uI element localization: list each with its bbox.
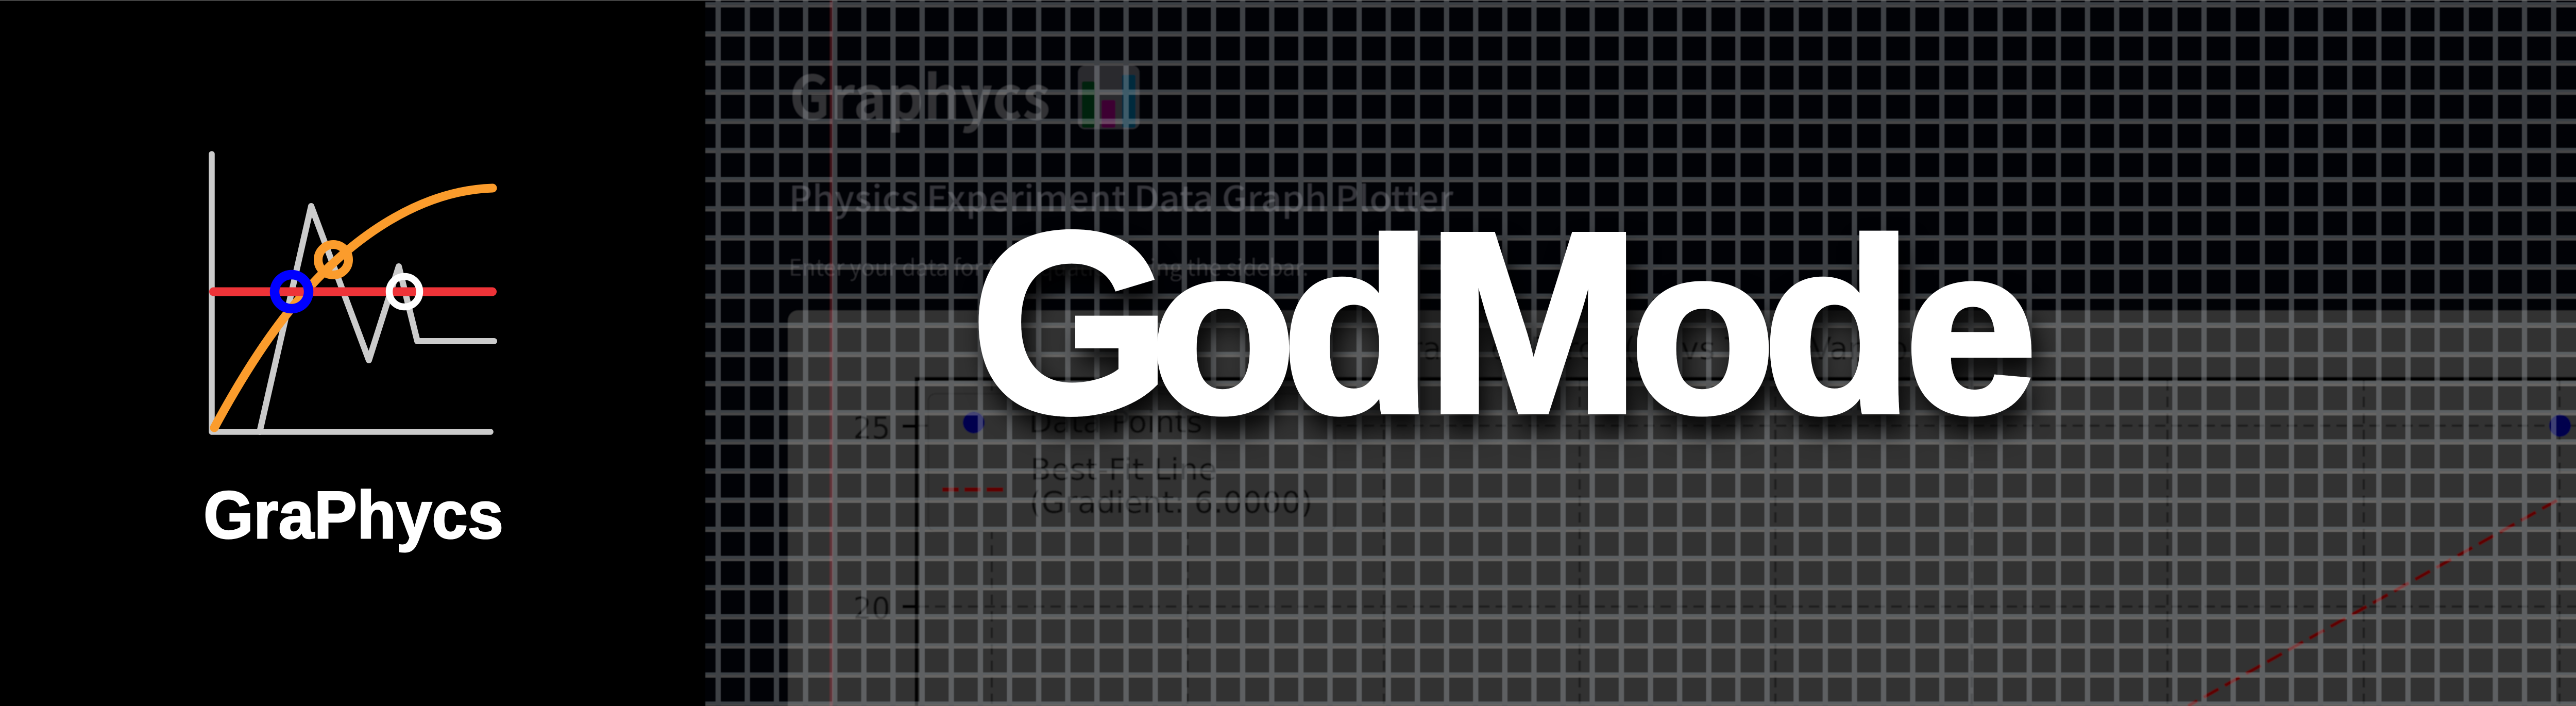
legend marker: data point	[963, 412, 985, 433]
icon: bar chart emoji	[1078, 65, 1140, 129]
orange curve	[214, 188, 493, 428]
subtitle: plotter heading: Physics Experiment Data Graph Plotter	[789, 171, 1453, 222]
heading: Graphycs: Graphycs	[789, 49, 1050, 137]
chart axes	[903, 377, 2576, 706]
y tick label 25: 25	[853, 410, 890, 446]
red line	[213, 288, 493, 296]
faded app screenshot	[788, 0, 2576, 706]
best-fit line	[2188, 500, 2557, 706]
top edge line	[0, 0, 2576, 1]
y tick label 20: 20	[853, 591, 890, 626]
main title: GodMode: e	[1905, 196, 2037, 462]
main title: GodMode: d	[1762, 189, 1913, 464]
right background panel	[705, 0, 2576, 706]
chart card	[788, 310, 2576, 706]
main title: GodMode: G	[971, 178, 1171, 466]
blue ring	[275, 275, 309, 309]
data point	[2549, 414, 2571, 437]
legend marker: best-fit dash	[942, 488, 1003, 492]
instruction text: Enter your data for the equation using the sidebar.	[789, 249, 1309, 282]
main title: GodMode: d	[1282, 189, 1432, 464]
chart title: Graph of Force (N) vs Time Variable	[1386, 331, 1936, 367]
white ring	[389, 276, 419, 307]
legend label: data points: Data Points	[1029, 405, 1202, 440]
legend	[928, 394, 1335, 531]
main title: GodMode: o	[1630, 196, 1775, 462]
legend label: gradient: (Gradient: 6.0000)	[1029, 485, 1313, 520]
left logo panel background	[0, 0, 705, 706]
graph paper grid	[716, 2, 2576, 706]
legend label: best-fit line: Best-Fit Line	[1030, 452, 1217, 487]
main title: GodMode: M	[1426, 178, 1641, 466]
grey data line	[260, 206, 494, 432]
chart grid dashes	[919, 380, 2576, 706]
orange ring	[318, 244, 348, 275]
axes	[212, 154, 490, 432]
main title: GodMode: o	[1150, 196, 1296, 462]
logo wordmark: GraPhycs	[204, 477, 503, 552]
red margin line	[829, 0, 833, 706]
logo: graph icon	[212, 154, 494, 432]
